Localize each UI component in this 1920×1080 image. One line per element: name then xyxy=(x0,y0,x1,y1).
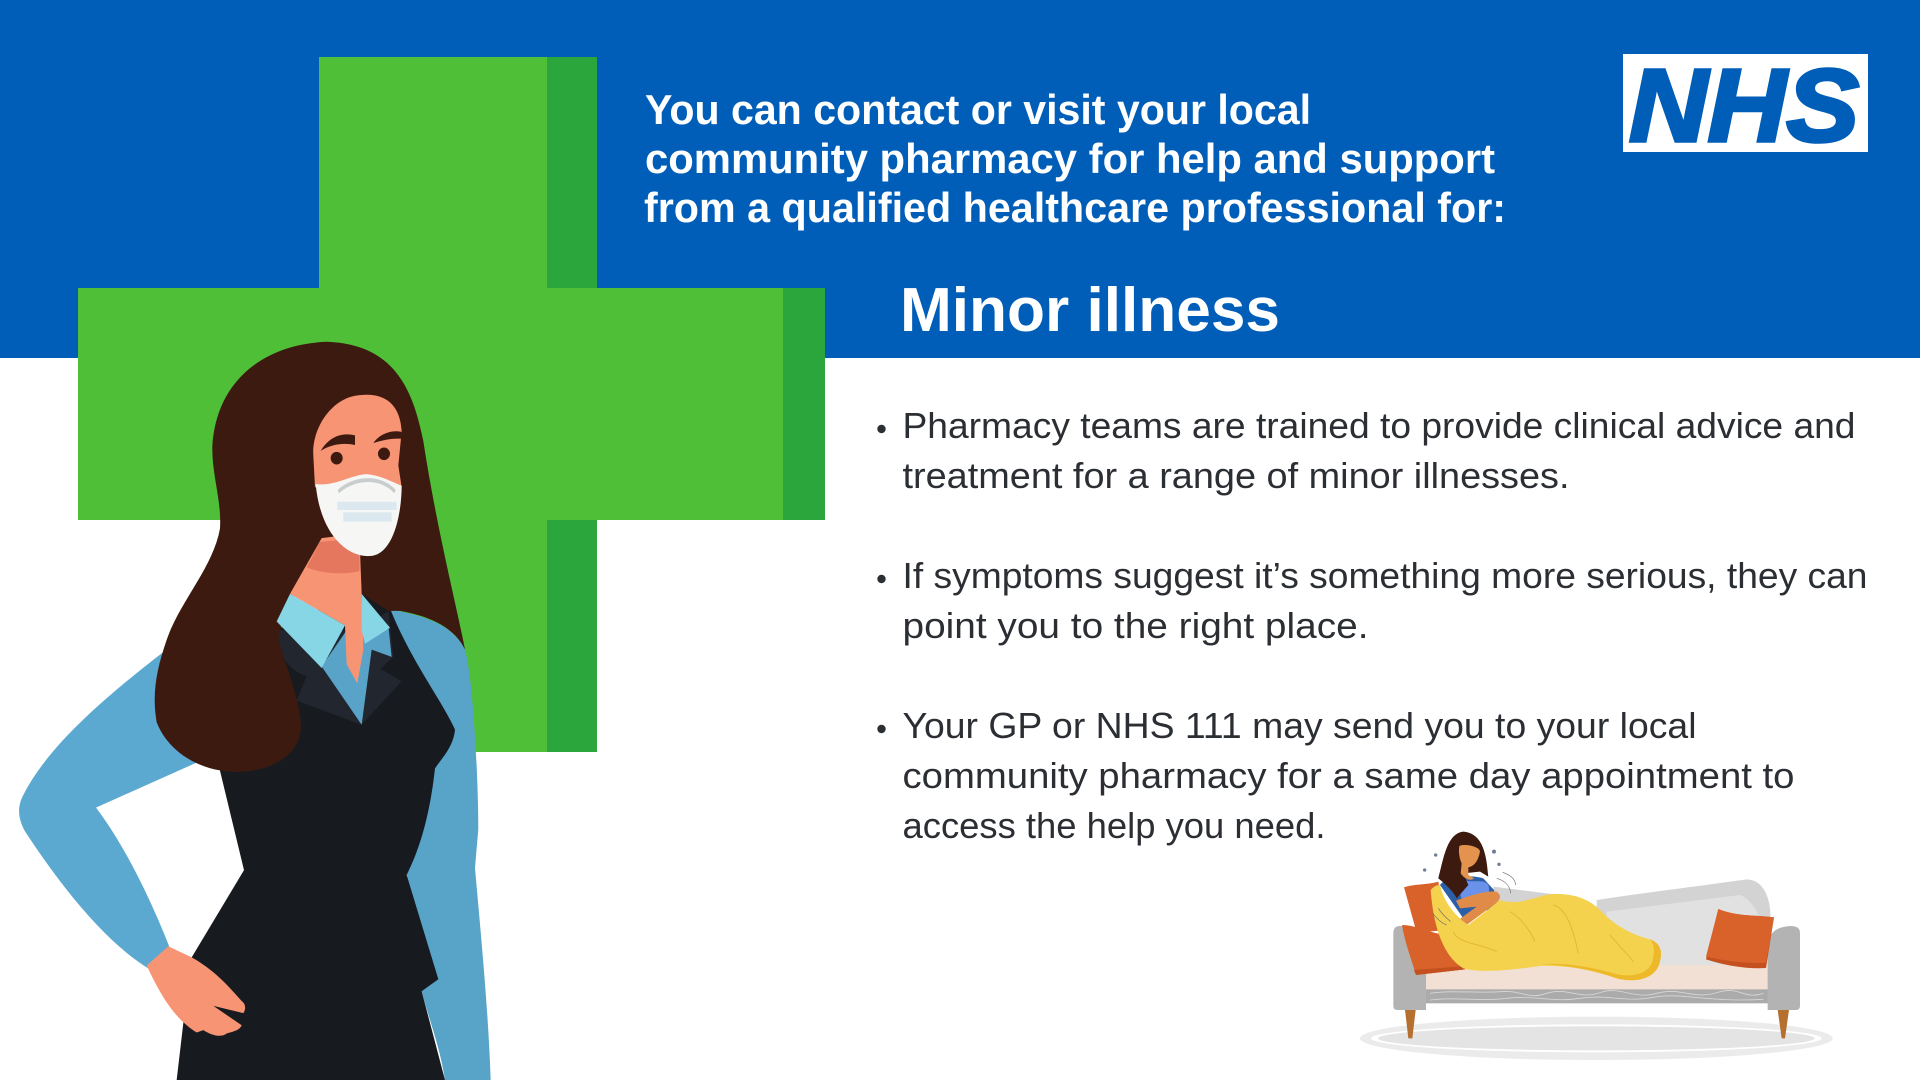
woman: face xyxy=(1459,845,1480,880)
text block: bullet list: point you to the right place. xyxy=(902,605,1368,646)
hair xyxy=(155,342,465,772)
lapels xyxy=(277,611,402,725)
eyebrows xyxy=(321,431,402,451)
sofa arms xyxy=(1393,926,1800,1010)
mask bands xyxy=(337,502,397,522)
face xyxy=(313,395,402,487)
woman: body xyxy=(1440,876,1500,925)
right sleeve xyxy=(387,609,491,1080)
text block: bullet list: If symptoms suggest it’s something more serious, they can xyxy=(902,555,1868,596)
shirt xyxy=(322,621,392,725)
sofa back xyxy=(1493,879,1771,967)
text block: bullet list: Your GP or NHS 111 may send you to your local xyxy=(902,705,1696,746)
sparkles xyxy=(1423,850,1501,872)
heading: intro text xyxy=(644,86,1506,231)
neck xyxy=(290,533,363,684)
sofa legs xyxy=(1405,1010,1789,1038)
text block: bullet list: access the help you need. xyxy=(902,805,1326,846)
sofa back panel xyxy=(1607,895,1768,967)
waistcoat and skirt xyxy=(177,589,455,1080)
icon: green pharmacy cross xyxy=(78,57,825,752)
heading: intro text: community pharmacy for help and support xyxy=(645,135,1495,182)
neck shadow xyxy=(307,538,359,573)
left pillows xyxy=(1402,882,1465,975)
illustration: unwell woman on sofa xyxy=(1360,832,1833,1060)
text block: bullet list: Pharmacy teams are trained to provide clinical advice and xyxy=(902,405,1856,446)
rug xyxy=(1360,1017,1833,1060)
title: Minor illness: Minor illness xyxy=(900,276,1280,345)
text block: bullet list xyxy=(877,405,1868,846)
eyes xyxy=(331,447,390,464)
blue header band xyxy=(0,0,1920,358)
sofa base xyxy=(1426,989,1768,1003)
heading: intro text: from a qualified healthcare professional for: xyxy=(644,184,1506,231)
mask wire xyxy=(338,480,395,492)
collar left xyxy=(277,594,345,668)
seat cushion xyxy=(1426,965,1768,990)
illustration: pharmacist in mask xyxy=(19,342,491,1080)
heading: intro text: You can contact or visit your local xyxy=(645,86,1311,133)
icon: NHS logo: NHS xyxy=(1629,48,1859,163)
woman: hair xyxy=(1438,832,1488,898)
right pillow xyxy=(1706,909,1774,968)
collar right xyxy=(362,594,390,644)
text block: bullet list: treatment for a range of minor illnesses. xyxy=(902,455,1570,496)
face mask xyxy=(316,474,402,556)
blanket xyxy=(1431,885,1661,980)
left sleeve xyxy=(19,652,200,969)
text block: bullet list: community pharmacy for a same day appointment to xyxy=(902,755,1794,796)
hand xyxy=(147,946,245,1036)
shiver marks xyxy=(1433,872,1516,925)
